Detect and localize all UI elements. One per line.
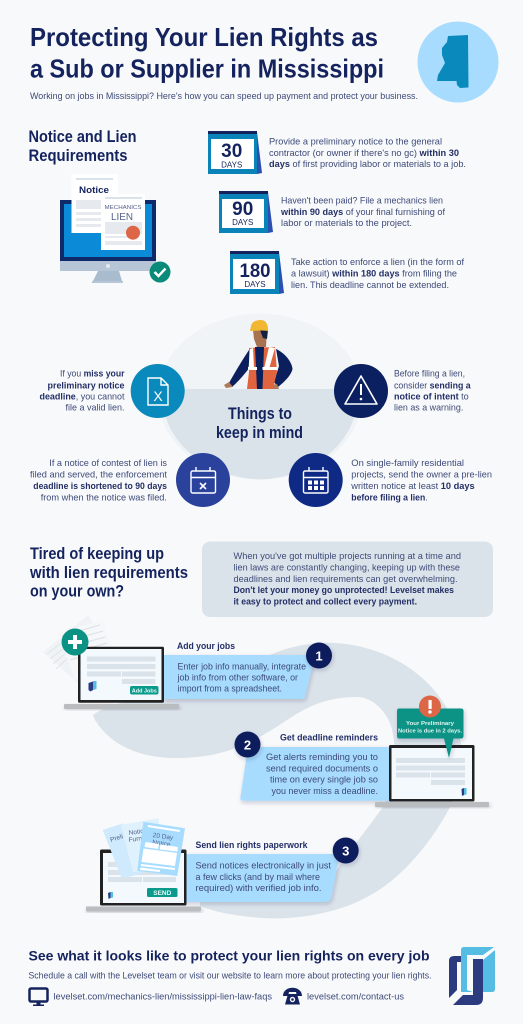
heading: notice and lien requirements: Requirements	[28, 147, 128, 165]
callout: preliminary notice reminder: Notice is due in 2 days.	[398, 728, 462, 734]
illustration: laptop with send button	[86, 850, 201, 912]
step 1: add your jobs	[43, 615, 332, 709]
panel: things to keep in mind circle	[158, 314, 362, 480]
icon: telephone	[283, 988, 302, 1004]
illustration: notice papers	[103, 818, 185, 878]
number badge 3	[333, 838, 359, 864]
step text: a few clicks (and by mail where	[196, 872, 320, 882]
text: missed preliminary notice: preliminary notice	[48, 380, 124, 390]
icon: document with x: X	[153, 388, 163, 404]
icon: calendar with x	[176, 453, 230, 507]
panel: intro callout: Don't let your money go unprotected! Levelset makes	[234, 585, 454, 595]
footer heading: See what it looks like to protect your lien rights on every job	[28, 948, 430, 964]
calendar: 180 days: 180	[240, 261, 270, 282]
subtitle: Working on jobs in Mississippi? Here's how you can speed up payment and protect your business.	[30, 91, 418, 101]
number badge 2: 2	[244, 738, 251, 752]
heading: things to keep in mind: Things to	[228, 405, 292, 423]
illustration: notice papers: Notic	[128, 828, 145, 837]
heading: things to keep in mind	[216, 405, 303, 442]
text: 180 day enforcement	[291, 257, 464, 290]
text: 180 day enforcement: Take action to enforce a lien (in the form of	[291, 257, 464, 267]
title: Protecting Your Lien Rights as	[30, 22, 378, 52]
calendar: 90 days	[219, 191, 273, 233]
icon: warning triangle	[334, 364, 388, 418]
calendar: 30 days	[208, 131, 262, 174]
text: notice of contest: If a notice of contest of lien is	[49, 458, 167, 468]
illustration: laptop with add jobs form	[64, 647, 179, 709]
number badge 1: 1	[315, 648, 323, 664]
text: 90 day mechanics lien: within 90 days of your final furnishing of	[280, 207, 445, 217]
document: notice: Notice	[79, 185, 109, 196]
text: single family residential: projects, send the owner a pre-lien	[351, 470, 492, 480]
step text: required) with verified job info.	[196, 883, 322, 893]
calendar: 90 days: DAYS	[232, 218, 253, 227]
link: contact us: levelset.com/contact-us	[307, 991, 404, 1002]
heading: tired of keeping up: on your own?	[30, 583, 124, 601]
panel: intro callout	[202, 542, 493, 617]
text: 180 day enforcement: a lawsuit) within 180 days from filing the	[291, 268, 457, 278]
step text: import from a spreadsheet.	[178, 684, 282, 694]
icon: plus	[62, 628, 88, 656]
title	[30, 22, 384, 84]
calendar: 180 days: DAYS	[244, 280, 266, 289]
illustration: monitor with notice and lien documents	[60, 174, 170, 283]
text: notice of contest	[30, 458, 167, 502]
step text: Enter job info manually, integrate	[178, 662, 306, 672]
text: notice of contest: filed and served, the enforcement	[30, 470, 167, 480]
panel: intro callout: deadlines and lien requirements can get overwhelming.	[234, 574, 458, 584]
heading: tired of keeping up: Tired of keeping up	[30, 545, 164, 563]
heading: tired of keeping up: with lien requirements	[29, 564, 188, 582]
document: mechanics lien	[101, 194, 145, 250]
number badge 2	[234, 732, 260, 758]
document: mechanics lien: MECHANICS	[104, 205, 142, 211]
text: 90 day mechanics lien: labor or materials to the project.	[281, 218, 412, 228]
icon: document with x	[131, 364, 185, 418]
heading: things to keep in mind: keep in mind	[216, 424, 303, 442]
heading: notice and lien requirements	[28, 128, 136, 165]
icon: computer monitor	[30, 988, 48, 1006]
link: lien law faqs: levelset.com/mechanics-lien/mississippi-lien-law-faqs	[54, 991, 272, 1002]
step text: you never miss a deadline.	[272, 786, 378, 796]
illustration: laptop with add jobs form: Add Jobs	[132, 688, 157, 694]
step title: Add your jobs	[177, 641, 235, 651]
number badge 3: 3	[342, 844, 349, 858]
text: notice of contest: from when the notice was filed.	[41, 492, 167, 502]
text: single family residential: before filing a lien.	[351, 492, 428, 502]
text: 90 day mechanics lien	[280, 196, 445, 228]
icon: alert	[419, 696, 441, 718]
illustration: laptop with send button: SEND	[153, 890, 172, 897]
illustration: notice papers: Furni	[128, 835, 144, 844]
step text	[177, 662, 306, 694]
logo: levelset	[449, 947, 495, 1005]
text: 180 day enforcement: lien. This deadline cannot be extended.	[291, 280, 449, 290]
text: 30 day preliminary notice	[269, 137, 466, 169]
text: notice of intent: consider sending a	[394, 380, 471, 390]
step text	[196, 861, 331, 893]
illustration: notice papers: Notice	[152, 839, 171, 849]
step text: job info from other software, or	[177, 672, 298, 682]
callout: preliminary notice reminder	[397, 708, 464, 758]
text: missed preliminary notice	[40, 369, 125, 413]
callout: preliminary notice reminder: Your Preliminary	[406, 721, 455, 727]
step title: Send lien rights paperwork	[196, 840, 308, 850]
illustration: stacked job papers	[43, 615, 118, 683]
step text: Send notices electronically in just	[196, 861, 331, 871]
text: notice of contest: deadline is shortened to 90 days	[33, 481, 167, 491]
text: single family residential: On single-family residential	[351, 458, 464, 468]
icon: calendar grid	[289, 453, 343, 507]
step text: time on every single job so	[270, 774, 378, 784]
title: a Sub or Supplier in Mississippi	[30, 54, 384, 84]
calendar: 90 days: 90	[232, 199, 253, 220]
card: send lien rights paperwork	[180, 854, 340, 902]
step 3: send lien rights paperwork	[86, 818, 359, 912]
number badge 1	[306, 642, 332, 668]
document: mechanics lien: LIEN	[111, 212, 133, 223]
text: notice of intent: notice of intent to	[394, 392, 469, 402]
heading: notice and lien requirements: Notice and Lien	[28, 128, 136, 146]
text: missed preliminary notice: If you miss your	[60, 369, 125, 379]
illustration: construction worker	[224, 320, 292, 389]
illustration: laptop with reminder	[375, 745, 489, 807]
text: single family residential: written notice at least 10 days	[350, 481, 475, 491]
illustration: notice papers: 20 Day	[152, 832, 174, 842]
step title: Get deadline reminders	[280, 733, 378, 743]
step text: send required documents o	[266, 764, 378, 774]
icon: Mississippi state map	[418, 22, 498, 102]
panel: intro callout: lien laws are constantly changing, keeping up with these	[234, 562, 460, 572]
calendar: 30 days: 30	[221, 141, 242, 162]
panel: intro callout: it easy to protect and collect every payment.	[234, 596, 417, 606]
text: missed preliminary notice: deadline, you cannot	[40, 392, 125, 402]
step 2: get deadline reminders	[234, 696, 489, 807]
panel: intro callout: When you've got multiple projects running at a time and	[234, 551, 461, 561]
text: 90 day mechanics lien: Haven't been paid? File a mechanics lien	[281, 196, 443, 206]
text: missed preliminary notice: file a valid lien.	[66, 403, 124, 413]
text: notice of intent: Before filing a lien,	[394, 369, 465, 379]
step text	[266, 752, 378, 796]
footer text: Schedule a call with the Levelset team or visit our website to learn more about protecting your lien rights.	[28, 970, 432, 980]
text: notice of intent: lien as a warning.	[394, 403, 463, 413]
text: 30 day preliminary notice: contractor (or owner if there's no gc) within 30	[269, 148, 459, 158]
text: 30 day preliminary notice: days of first providing labor or materials to a job.	[269, 159, 466, 169]
text: single family residential	[350, 458, 492, 502]
card: get deadline reminders	[240, 747, 390, 801]
heading: tired of keeping up	[29, 545, 188, 601]
illustration: notice papers: Preli	[109, 833, 124, 844]
calendar: 180 days	[230, 251, 284, 294]
icon: check mark	[150, 262, 170, 282]
step text: Get alerts reminding you to	[266, 752, 378, 762]
decorative ribbon path linking the steps	[93, 643, 463, 918]
calendar: 30 days: DAYS	[221, 160, 242, 170]
text: 30 day preliminary notice: Provide a preliminary notice to the general	[269, 137, 442, 147]
card: add your jobs	[164, 655, 315, 699]
text: notice of intent	[394, 369, 471, 413]
